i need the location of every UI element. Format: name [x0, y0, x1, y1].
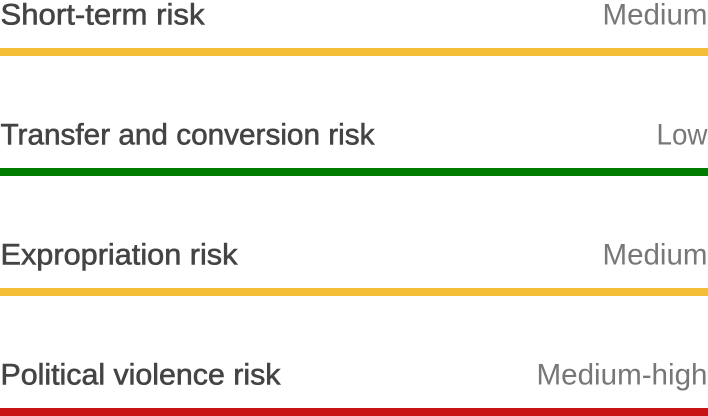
- rating: medium: Medium: [602, 238, 708, 272]
- label: political violence risk: Political violence risk: [0, 358, 281, 392]
- row: expropriation risk: [0, 238, 708, 296]
- row: short-term risk: [0, 0, 708, 56]
- rating: medium-high: Medium-high: [536, 358, 708, 392]
- rating bar: red: [0, 408, 708, 416]
- rating bar: green: [0, 168, 708, 176]
- label: expropriation risk: Expropriation risk: [0, 238, 239, 272]
- row: transfer and conversion risk: [0, 118, 708, 176]
- rating bar: yellow: [0, 48, 708, 56]
- label: transfer and conversion risk: Transfer and conversion risk: [0, 118, 375, 152]
- rating bar: yellow: [0, 288, 708, 296]
- row: political violence risk: [0, 358, 708, 416]
